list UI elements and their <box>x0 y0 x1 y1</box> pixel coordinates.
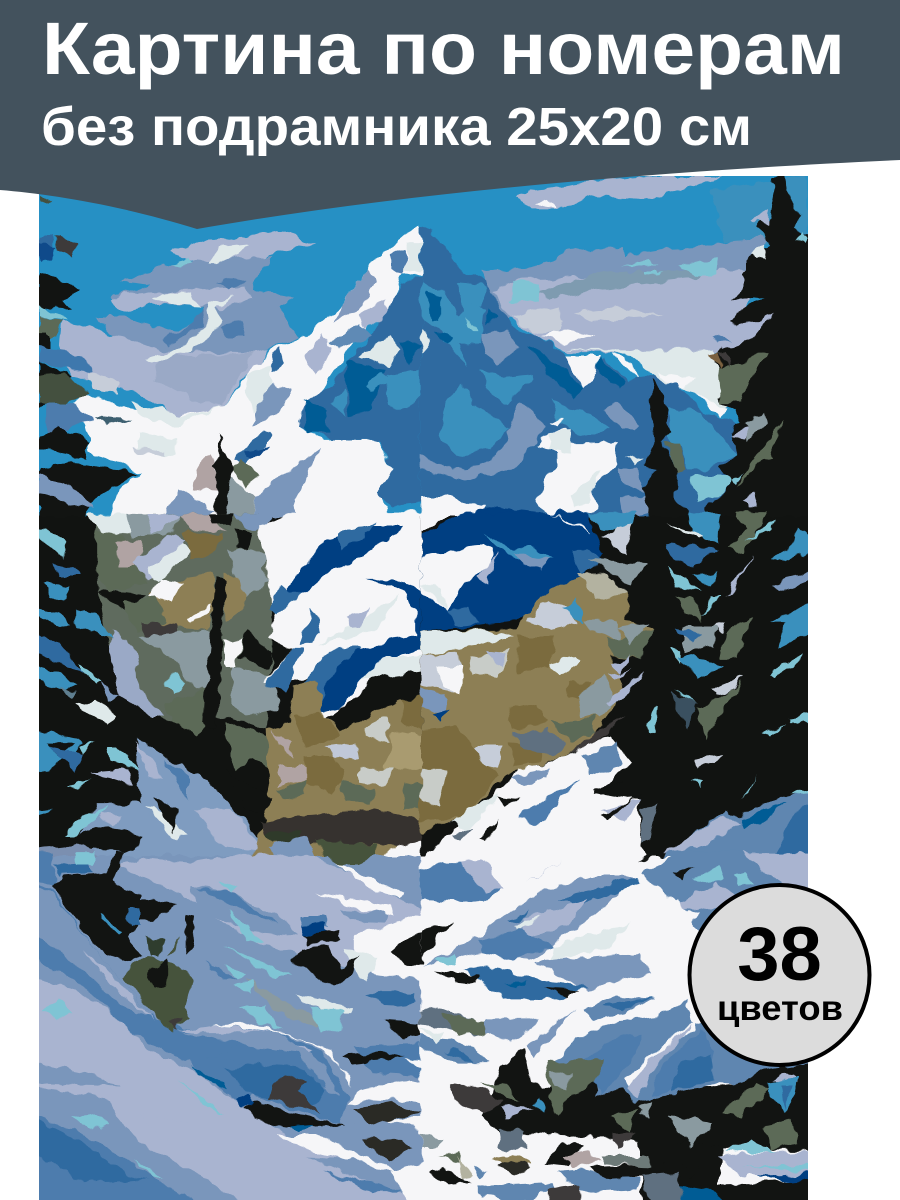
navy band, brown forest, dark fir <box>421 513 817 859</box>
subtitle: без подрамника 25х20 см <box>41 97 752 157</box>
badge number: 38 <box>737 912 822 997</box>
badge: 38 colours <box>690 885 870 1065</box>
sky, clouds, peak and right fir <box>421 166 817 519</box>
badge label: цветов <box>717 989 843 1028</box>
white stream, blue drifts and dark rocks lower right <box>421 853 817 1200</box>
title: Картина по номерам <box>42 7 845 90</box>
sky, clouds and left slope of the peak <box>39 194 425 518</box>
painting: snowy mountain landscape <box>29 166 817 1200</box>
snow slopes, rocks and swirl lower left <box>29 853 432 1200</box>
header banner <box>0 0 900 229</box>
left firs, larch tree, navy snow bands <box>29 513 432 859</box>
